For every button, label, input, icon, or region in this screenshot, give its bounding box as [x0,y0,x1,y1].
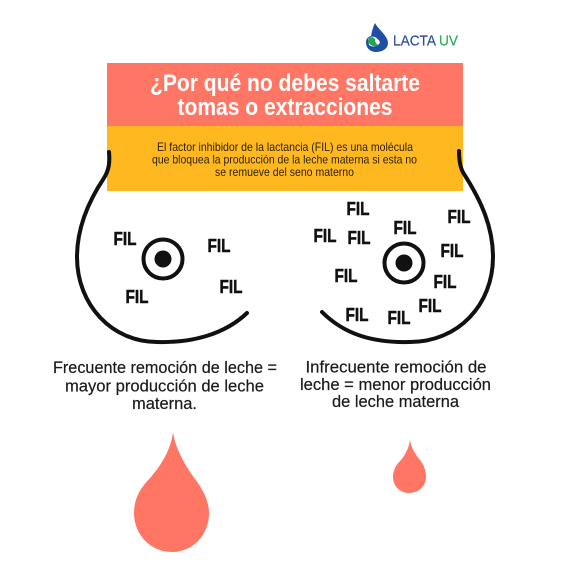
breast diagram: infrequent removal [314,151,493,342]
FIL labels right: FIL [314,226,336,246]
caption left: materna. [132,394,197,413]
FIL labels right: FIL [348,228,370,248]
caption right: de leche materna [332,392,460,411]
caption right: leche = menor producción [300,375,491,394]
icon: logo drop [366,23,388,52]
caption left: Frecuente remoción de leche = [53,358,277,377]
FIL labels right: FIL [434,272,456,292]
breast diagram: frequent removal [77,152,247,342]
logo wordmark: LACTA UV [393,32,458,50]
nipple left [144,240,182,278]
FIL labels left: FIL [220,277,242,297]
caption right: Infrecuente remoción de [306,358,486,376]
icon: small milk drop [393,440,426,493]
FIL labels left: FIL [208,236,230,256]
breast outline right [322,151,493,342]
title banner [107,63,463,127]
caption left: mayor producción de leche [65,376,264,396]
FIL labels right: FIL [388,308,410,328]
FIL labels right: FIL [346,199,370,219]
logo: Lacta UV [366,23,458,52]
FIL labels right: FIL [440,241,464,261]
FIL labels right: FIL [334,266,358,286]
FIL labels left [114,229,242,307]
FIL labels right: FIL [448,207,470,227]
intro text: El factor inhibidor de la lactancia (FIL) es una molécula [157,140,413,154]
FIL labels right: FIL [346,305,368,325]
FIL labels right: FIL [394,218,416,238]
icon: large milk drop [134,432,209,552]
breast outline left [77,152,247,342]
title: ¿Por qué no debes saltarte [150,70,420,97]
FIL labels right: FIL [418,296,442,316]
FIL labels left: FIL [114,229,136,249]
title: tomas o extracciones [178,94,392,121]
nipple right [384,244,424,282]
FIL labels right [314,199,470,328]
intro text: que bloquea la producción de la leche materna si esta no [152,152,417,166]
intro text: se remueve del seno materno [215,165,354,179]
intro panel [107,126,463,191]
FIL labels left: FIL [126,287,148,307]
